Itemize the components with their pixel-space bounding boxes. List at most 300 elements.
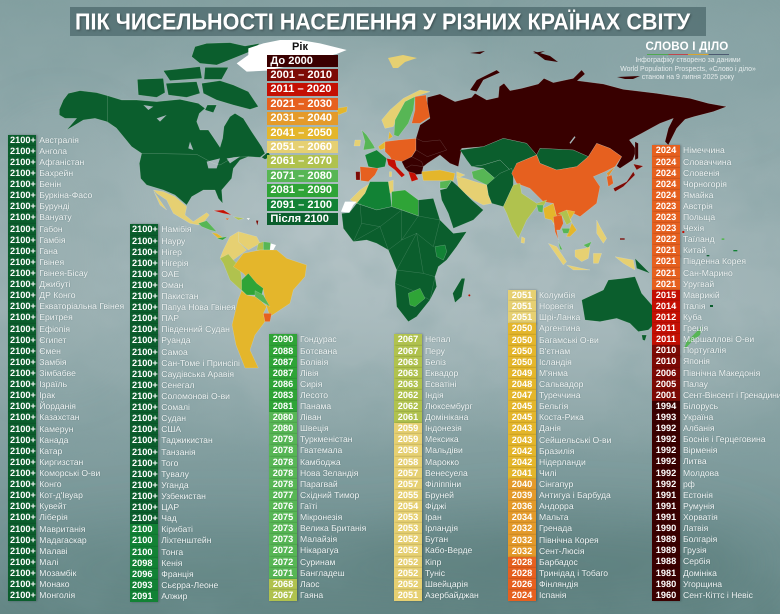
list column 2: 2100+ to 2091: 2100+ <box>132 291 158 301</box>
list column 1: 2100+: Канада <box>39 435 68 445</box>
list column 5: 2051 to 2024: 2051 <box>512 290 532 300</box>
list column 3: 2090 to 2067: Мікронезія <box>300 512 342 522</box>
list column 1: 2100+: 2100+ <box>10 435 36 445</box>
list column 2: 2100+ to 2091: Південний Судан <box>161 324 230 334</box>
Argentina and Chile <box>232 291 267 368</box>
list column 6: 2024 to 1960: Чорногорія <box>683 179 727 189</box>
list column 4: 2067 to 2051: 2067 <box>398 334 418 344</box>
Afghanistan and Pakistan <box>487 168 513 207</box>
list column 5: 2051 to 2024: 2042 <box>512 446 532 456</box>
Russia and Eastern Europe <box>402 70 727 175</box>
list column 5: 2051 to 2024: 2050 <box>512 346 532 356</box>
list column 3: 2090 to 2067: Гаїті <box>300 501 317 511</box>
list column 3: 2090 to 2067: 2073 <box>273 523 293 533</box>
list column 6: 2024 to 1960: 1994 <box>656 401 676 411</box>
logo and source note: СЛОВО І ДІЛО <box>645 40 729 53</box>
list column 5: 2051 to 2024: 2049 <box>512 368 532 378</box>
list column 2: 2100+ to 2091: 2100+ <box>132 258 158 268</box>
list column 1: 2100+: Бурунді <box>39 201 70 211</box>
list column 6: 2024 to 1960: Білорусь <box>683 401 718 411</box>
list column 1: 2100+: Ефіопія <box>39 324 70 334</box>
list column 1: 2100+: Ізраїль <box>39 379 67 389</box>
Turkey <box>422 170 455 181</box>
Cambodia <box>562 228 570 233</box>
list column 3: 2090 to 2067: Велика Британія <box>300 523 366 533</box>
list column 2: 2100+ to 2091: Того <box>161 458 178 468</box>
list column 5: 2051 to 2024: Норвегія <box>539 301 574 311</box>
Benelux <box>378 142 385 150</box>
Malaysia <box>558 242 563 250</box>
list column 1: 2100+: 2100+ <box>10 390 36 400</box>
list column 5: 2051 to 2024: Бразилія <box>539 446 574 456</box>
list column 6: 2024 to 1960: 2001 <box>656 390 676 400</box>
list column 6: 2024 to 1960: 2015 <box>656 290 676 300</box>
list column 3: 2090 to 2067: Парагвай <box>300 479 338 489</box>
list column 1: 2100+: 2100+ <box>10 468 36 478</box>
list column 6: 2024 to 1960: Польща <box>683 212 715 222</box>
list column 1: 2100+: 2100+ <box>10 590 36 600</box>
title band <box>70 7 706 36</box>
list column 1: 2100+: 2100+ <box>10 301 36 311</box>
list column 3: 2090 to 2067: 2087 <box>273 368 293 378</box>
French Guiana <box>270 243 276 250</box>
list column 5: 2051 to 2024: 2032 <box>512 534 532 544</box>
legend: peak year ranges: Після 2100 <box>270 213 329 225</box>
list column 1: 2100+: Кот-д'Івуар <box>39 490 83 500</box>
list column 3: 2090 to 2067: 2090 <box>273 334 293 344</box>
list column 5: 2051 to 2024: Гренада <box>539 523 572 533</box>
list column 6: 2024 to 1960: Японія <box>683 356 710 366</box>
list column 1: 2100+: 2100+ <box>10 335 36 345</box>
Iran <box>457 177 492 205</box>
list column 1: 2100+: Габон <box>39 224 63 234</box>
list column 2: 2100+ to 2091: Чад <box>161 513 177 523</box>
list column 6: 2024 to 1960: 2024 <box>656 190 676 200</box>
Mexico <box>153 190 209 225</box>
list column 1: 2100+: Конго <box>39 479 62 489</box>
list column 5: 2051 to 2024: Сейшельські О-ви <box>539 435 611 445</box>
Spain <box>360 167 378 182</box>
list column 5: 2051 to 2024: Андорра <box>539 501 574 511</box>
list column 4: 2067 to 2051: Іран <box>425 512 442 522</box>
list column 3: 2090 to 2067: 2068 <box>273 579 293 589</box>
list column 1: 2100+: Коморські О-ви <box>39 468 100 478</box>
list column 1: 2100+: 2100+ <box>10 512 36 522</box>
list column 2: 2100+ to 2091: 2100+ <box>132 224 158 234</box>
list column 6: 2024 to 1960: 2012 <box>656 312 676 322</box>
list column 1: 2100+: 2100+ <box>10 179 36 189</box>
list column 1: 2100+: 2100+ <box>10 146 36 156</box>
list column 1: 2100+: 2100+ <box>10 246 36 256</box>
list column 2: 2100+ to 2091: Нігерія <box>161 258 188 268</box>
list column 4: 2067 to 2051: Туніс <box>425 568 445 578</box>
list column 4: 2067 to 2051: 2062 <box>398 401 418 411</box>
list column 1: 2100+: Киргизстан <box>39 457 83 467</box>
list column 6: 2024 to 1960: Таїланд <box>683 234 715 244</box>
list column 3: 2090 to 2067: 2072 <box>273 545 293 555</box>
Myanmar <box>543 203 557 230</box>
list column 2: 2100+ to 2091: 2100+ <box>132 313 158 323</box>
list column 4: 2067 to 2051: 2058 <box>398 445 418 455</box>
list column 6: 2024 to 1960: 1960 <box>656 590 676 600</box>
list column 1: 2100+: 2100+ <box>10 324 36 334</box>
list column 2: 2100+ to 2091: 2100+ <box>132 236 158 246</box>
list column 4: 2067 to 2051: 2062 <box>398 390 418 400</box>
list column 1: 2100+: Ємен <box>39 346 61 356</box>
list column 6: 2024 to 1960: Португалія <box>683 345 726 355</box>
title: ПІК ЧИСЕЛЬНОСТІ НАСЕЛЕННЯ У РІЗНИХ КРАЇНАХ СВІТУ <box>75 8 690 35</box>
list column 6: 2024 to 1960: 2023 <box>656 223 676 233</box>
list column 1: 2100+: Йорданія <box>39 401 76 411</box>
list column 3: 2090 to 2067: 2073 <box>273 534 293 544</box>
list column 4: 2067 to 2051: Мексика <box>425 434 459 444</box>
list column 2: 2100+ to 2091: 2100 <box>132 524 152 534</box>
list column 6: 2024 to 1960: Словенія <box>683 168 720 178</box>
list column 4: 2067 to 2051: Марокко <box>425 457 459 467</box>
Botswana <box>408 288 425 307</box>
South America north: Colombia and Venezuela <box>220 232 247 260</box>
list column 3: 2090 to 2067: Східний Тимор <box>300 490 359 500</box>
list column 2: 2100+ to 2091: 2100+ <box>132 402 158 412</box>
Germany, Poland, Austria, Czechia <box>385 138 416 162</box>
list column 2: 2100+ to 2091: Алжир <box>161 591 187 601</box>
list column 6: 2024 to 1960: Латвія <box>683 523 708 533</box>
list column 1: 2100+: Ангола <box>39 146 67 156</box>
list column 1: 2100+: 2100+ <box>10 368 36 378</box>
list column 1: 2100+: 2100+ <box>10 412 36 422</box>
list column 2: 2100+ to 2091: 2100+ <box>132 447 158 457</box>
list column 4: 2067 to 2051: Еквадор <box>425 368 458 378</box>
list column 4: 2067 to 2051: Непал <box>425 334 450 344</box>
list column 6: 2024 to 1960: Угорщина <box>683 579 722 589</box>
list column 2: 2100+ to 2091: 2100+ <box>132 491 158 501</box>
list column 5: 2051 to 2024: Іспанія <box>539 590 566 600</box>
Caribbean islands <box>213 210 232 215</box>
list column 1: 2100+: 2100+ <box>10 190 36 200</box>
list column 3: 2090 to 2067: 2078 <box>273 479 293 489</box>
list column 6: 2024 to 1960: 2024 <box>656 156 676 166</box>
list column 4: 2067 to 2051: Індія <box>425 390 444 400</box>
list column 1: 2100+: Єгипет <box>39 335 66 345</box>
list column 2: 2100+ to 2091: Намібія <box>161 224 192 234</box>
list column 1: 2100+: Екваторіальна Гвінея <box>39 301 124 311</box>
legend: peak year ranges: 2011 – 2020 <box>270 83 331 95</box>
list column 2: 2100+ to 2091: Узбекистан <box>161 491 206 501</box>
list column 3: 2090 to 2067: Ботсвана <box>300 346 337 356</box>
list column 3: 2090 to 2067: Сирія <box>300 379 322 389</box>
list column 5: 2051 to 2024: Аргентина <box>539 323 580 333</box>
list column 3: 2090 to 2067: 2081 <box>273 401 293 411</box>
list column 6: 2024 to 1960: Куба <box>683 312 702 322</box>
Azerbaijan <box>457 172 465 178</box>
Pacific islands <box>468 231 737 307</box>
list column 5: 2051 to 2024: Багамські О-ви <box>539 335 599 345</box>
list column 3: 2090 to 2067: Бангладеш <box>300 568 345 578</box>
list column 2: 2100+ to 2091: 2100+ <box>132 247 158 257</box>
list column 1: 2100+: Замбія <box>39 357 67 367</box>
Bolivia <box>242 273 263 295</box>
list column 1: 2100+: 2100+ <box>10 157 36 167</box>
list column 6: 2024 to 1960: 1989 <box>656 545 676 555</box>
list column 6: 2024 to 1960: 1991 <box>656 512 676 522</box>
list column 3: 2090 to 2067: Суринам <box>300 557 335 567</box>
list column 2: 2100+ to 2091: 2100+ <box>132 324 158 334</box>
list column 6: 2024 to 1960: 1993 <box>656 412 676 422</box>
list column 1: 2100+: 2100+ <box>10 290 36 300</box>
Indonesia <box>548 243 567 265</box>
list column 1: 2100+: 2100+ <box>10 268 36 278</box>
list column 4: 2067 to 2051: 2052 <box>398 545 418 555</box>
list column 6: 2024 to 1960: Австрія <box>683 201 713 211</box>
list column 2: 2100+ to 2091: Таджикистан <box>161 435 213 445</box>
list column 1: 2100+: Монголія <box>39 590 75 600</box>
list column 1: 2100+: 2100+ <box>10 446 36 456</box>
Brazil <box>233 250 307 317</box>
list column 1: 2100+: 2100+ <box>10 479 36 489</box>
list column 6: 2024 to 1960: Хорватія <box>683 512 718 522</box>
list column 4: 2067 to 2051: 2051 <box>398 590 418 600</box>
list column 1: 2100+: Ірак <box>39 390 55 400</box>
Western Sahara <box>341 202 357 213</box>
list column 1: 2100+: ДР Конго <box>39 290 75 300</box>
list column 6: 2024 to 1960: Литва <box>683 456 707 466</box>
list column 6: 2024 to 1960: 2021 <box>656 256 676 266</box>
list column 2: 2100+ to 2091: 2100+ <box>132 380 158 390</box>
list column 6: 2024 to 1960: 2021 <box>656 245 676 255</box>
Korea <box>607 167 615 177</box>
Sri Lanka <box>521 237 525 243</box>
list column 4: 2067 to 2051: 2053 <box>398 523 418 533</box>
list column 2: 2100+ to 2091: Уганда <box>161 480 189 490</box>
United Kingdom <box>362 130 375 150</box>
list column 1: 2100+: 2100+ <box>10 490 36 500</box>
list column 3: 2090 to 2067: Малайзія <box>300 534 337 544</box>
list column 5: 2051 to 2024: Коста-Рика <box>539 412 584 422</box>
list column 2: 2100+ to 2091: 2100 <box>132 547 152 557</box>
list column 1: 2100+: Зімбабве <box>39 368 76 378</box>
list column 3: 2090 to 2067: Туркменістан <box>300 434 353 444</box>
list column 6: 2024 to 1960: 2024 <box>656 145 676 155</box>
list column 3: 2090 to 2067: Ліван <box>300 412 322 422</box>
list column 3: 2090 to 2067: 2086 <box>273 379 293 389</box>
list column 2: 2100+ to 2091: Кірибаті <box>161 524 193 534</box>
list column 4: 2067 to 2051: 2052 <box>398 557 418 567</box>
Uruguay <box>263 313 272 322</box>
list column 2: 2100+ to 2091: 2100 <box>132 535 152 545</box>
list column 5: 2051 to 2024: Ісландія <box>539 357 572 367</box>
list column 5: 2051 to 2024: Шрі-Ланка <box>539 312 580 322</box>
list column 4: 2067 to 2051: 2059 <box>398 434 418 444</box>
list column 6: 2024 to 1960: 1992 <box>656 456 676 466</box>
Papua New Guinea <box>635 258 650 273</box>
Portugal <box>356 172 360 180</box>
list column 4: 2067 to 2051: Есватіні <box>425 379 456 389</box>
list column 2: 2100+ to 2091: 2100+ <box>132 302 158 312</box>
list column 6: 2024 to 1960: 1991 <box>656 490 676 500</box>
list column 5: 2051 to 2024: Нідерланди <box>539 457 586 467</box>
Guyana <box>257 242 263 250</box>
list column 5: 2051 to 2024: Чилі <box>539 468 556 478</box>
list column 2: 2100+ to 2091: 2093 <box>132 580 152 590</box>
list column 5: 2051 to 2024: 2032 <box>512 546 532 556</box>
list column 3: 2090 to 2067: Гаяна <box>300 590 323 600</box>
list column 6: 2024 to 1960: Чехія <box>683 223 704 233</box>
legend: peak year ranges: 2021 – 2030 <box>270 98 332 110</box>
list column 5: 2051 to 2024: Антигуа і Барбуда <box>539 490 611 500</box>
list column 5: 2051 to 2024: 2050 <box>512 335 532 345</box>
list column 6: 2024 to 1960: Китай <box>683 245 706 255</box>
list column 6: 2024 to 1960: 2023 <box>656 212 676 222</box>
list column 1: 2100+: Гана <box>39 246 58 256</box>
list column 5: 2051 to 2024: 2045 <box>512 412 532 422</box>
legend: peak year ranges: До 2000 <box>270 55 313 67</box>
Turkmenistan <box>472 168 497 185</box>
list column 4: 2067 to 2051: Бруней <box>425 490 454 500</box>
list column 5: 2051 to 2024: 2043 <box>512 435 532 445</box>
list column 5: 2051 to 2024: 2051 <box>512 312 532 322</box>
map: Eurasia, Africa, Oceania <box>341 70 737 351</box>
list column 5: 2051 to 2024: 2028 <box>512 557 532 567</box>
list column 3: 2090 to 2067: 2080 <box>273 412 293 422</box>
Paraguay <box>255 291 270 307</box>
Arabia and Iraq <box>440 181 483 228</box>
list column 1: 2100+ <box>8 134 124 602</box>
list column 5: 2051 to 2024: Туреччина <box>539 390 581 400</box>
list column 1: 2100+: Афганістан <box>39 157 84 167</box>
list column 4: 2067 to 2051: Фіджі <box>425 501 446 511</box>
list column 3: 2090 to 2067: Камбоджа <box>300 457 341 467</box>
list column 4: 2067 to 2051: 2063 <box>398 357 418 367</box>
Greenland <box>237 40 347 72</box>
legend: peak year ranges: 2041 – 2050 <box>270 127 332 139</box>
list column 1: 2100+: Джибуті <box>39 279 71 289</box>
list column 5: 2051 to 2024: Колумбія <box>539 290 575 300</box>
list column 3: 2090 to 2067: 2088 <box>273 346 293 356</box>
list column 6: 2024 to 1960: Північна Македонія <box>683 368 760 378</box>
list column 4: 2067 to 2051: Кіпр <box>425 557 441 567</box>
list column 2: 2100+ to 2091: 2100+ <box>132 280 158 290</box>
list column 6: 2024 to 1960: 2014 <box>656 301 676 311</box>
list column 2: 2100+ to 2091: Танзанія <box>161 447 196 457</box>
list column 2: 2100+ to 2091: 2100+ <box>132 424 158 434</box>
list column 6: 2024 to 1960: 2010 <box>656 356 676 366</box>
list column 2: 2100+ to 2091: 2100+ <box>132 269 158 279</box>
list column 6: 2024 to 1960: 1992 <box>656 434 676 444</box>
list column 6: 2024 to 1960: 1990 <box>656 523 676 533</box>
list column 6: 2024 to 1960: 2024 <box>656 179 676 189</box>
list column 5: 2051 to 2024: 2043 <box>512 423 532 433</box>
list column 6: 2024 to 1960: Грузія <box>683 545 707 555</box>
list column 2: 2100+ to 2091: ПАР <box>161 313 179 323</box>
list column 1: 2100+: Малаві <box>39 546 68 556</box>
list column 1: 2100+: 2100+ <box>10 557 36 567</box>
list column 6: 2024 to 1960: 2011 <box>656 323 676 333</box>
list column 1: 2100+: Австралія <box>39 135 79 145</box>
list column 1: 2100+: 2100+ <box>10 457 36 467</box>
list column 2: 2100+ to 2091: 2100+ <box>132 502 158 512</box>
Suriname <box>263 242 271 250</box>
list column 5: 2051 to 2024: 2042 <box>512 457 532 467</box>
list column 6: 2024 to 1960: рф <box>683 479 695 489</box>
China <box>512 143 622 217</box>
list column 2: 2100+ to 2091: Оман <box>161 280 183 290</box>
list column 2: 2100+ to 2091: 2100+ <box>132 469 158 479</box>
list column 4: 2067 to 2051: Ірландія <box>425 523 458 533</box>
list column 2: 2100+ to 2091: 2100+ <box>132 335 158 345</box>
list column 6: 2024 to 1960: 2006 <box>656 368 676 378</box>
list column 5: 2051 to 2024: 2051 <box>512 301 532 311</box>
list column 6: 2024 to 1960: 1992 <box>656 479 676 489</box>
list column 2: 2100+ to 2091: 2100+ <box>132 347 158 357</box>
list column 6: 2024 to 1960: 2005 <box>656 379 676 389</box>
Libya <box>392 190 418 216</box>
list column 6: 2024 to 1960: Палау <box>683 379 708 389</box>
list column 6: 2024 to 1960: 2021 <box>656 279 676 289</box>
logo and source note: станом на 9 липня 2025 року <box>642 74 734 81</box>
Sakhalin <box>635 142 638 160</box>
list column 6: 2024 to 1960: 2010 <box>656 345 676 355</box>
list column 2: 2100+ to 2091: 2100+ <box>132 391 158 401</box>
list column 5: 2051 to 2024: Барбадос <box>539 557 578 567</box>
Australia <box>582 277 655 332</box>
legend: peak year ranges: 2031 – 2040 <box>270 112 332 124</box>
list column 1: 2100+: 2100+ <box>10 401 36 411</box>
list column 2: 2100+ to 2091: Судан <box>161 413 186 423</box>
list column 5: 2051 to 2024: 2026 <box>512 579 532 589</box>
list column 2: 2100+ to 2091: Науру <box>161 236 185 246</box>
list column 1: 2100+: 2100+ <box>10 168 36 178</box>
list column 4: 2067 to 2051: 2052 <box>398 534 418 544</box>
Ecuador and Peru <box>220 254 247 291</box>
list column 6: 2024 to 1960: Словаччина <box>683 156 731 166</box>
list column 2: 2100+ to 2091: 2100+ <box>132 513 158 523</box>
list column 2: 2100+ to 2091: Франція <box>161 569 194 579</box>
list column 4: 2067 to 2051: Перу <box>425 346 445 356</box>
list column 5: 2051 to 2024: 2048 <box>512 379 532 389</box>
list column 2: 2100+ to 2091: ЦАР <box>161 502 179 512</box>
list column 6: 2024 to 1960: Сент-Вінсент і Гренадини <box>683 390 780 400</box>
list column 6: 2024 to 1960: Сербія <box>683 556 710 566</box>
list column 1: 2100+: 2100+ <box>10 135 36 145</box>
list column 2: 2100+ to 2091: США <box>161 424 181 434</box>
list column 4: 2067 to 2051: 2055 <box>398 490 418 500</box>
Kenya <box>435 245 447 260</box>
Denmark <box>388 132 393 139</box>
list column 1: 2100+: 2100+ <box>10 224 36 234</box>
list column 5: 2051 to 2024: Данія <box>539 423 561 433</box>
list column 3: 2090 to 2067: 2078 <box>273 468 293 478</box>
legend: peak year ranges: Рік <box>292 41 308 53</box>
list column 6: 2024 to 1960: Маврикій <box>683 290 720 300</box>
list column 1: 2100+: 2100+ <box>10 379 36 389</box>
list column 3: 2090 to 2067: 2087 <box>273 357 293 367</box>
list column 4: 2067 to 2051: Беліз <box>425 357 446 367</box>
list column 1: 2100+: 2100+ <box>10 201 36 211</box>
list column 5: 2051 to 2024: 2040 <box>512 479 532 489</box>
list column 2: 2100+ to 2091: Самоа <box>161 347 188 357</box>
list column 1: 2100+: 2100+ <box>10 568 36 578</box>
list column 6: 2024 to 1960: Південна Корея <box>683 256 746 266</box>
list column 5: 2051 to 2024: 2050 <box>512 357 532 367</box>
list column 6: 2024 to 1960: 1988 <box>656 556 676 566</box>
list column 6: 2024 to 1960: Болгарія <box>683 534 717 544</box>
Italy <box>387 158 405 177</box>
lakes and borders of North America <box>143 105 240 168</box>
list column 6: 2024 to 1960: 1992 <box>656 445 676 455</box>
list column 3: 2090 to 2067: Нова Зеландія <box>300 468 358 478</box>
New Zealand <box>683 327 702 351</box>
list column 2: 2100+ to 2091: 2100+ <box>132 358 158 368</box>
